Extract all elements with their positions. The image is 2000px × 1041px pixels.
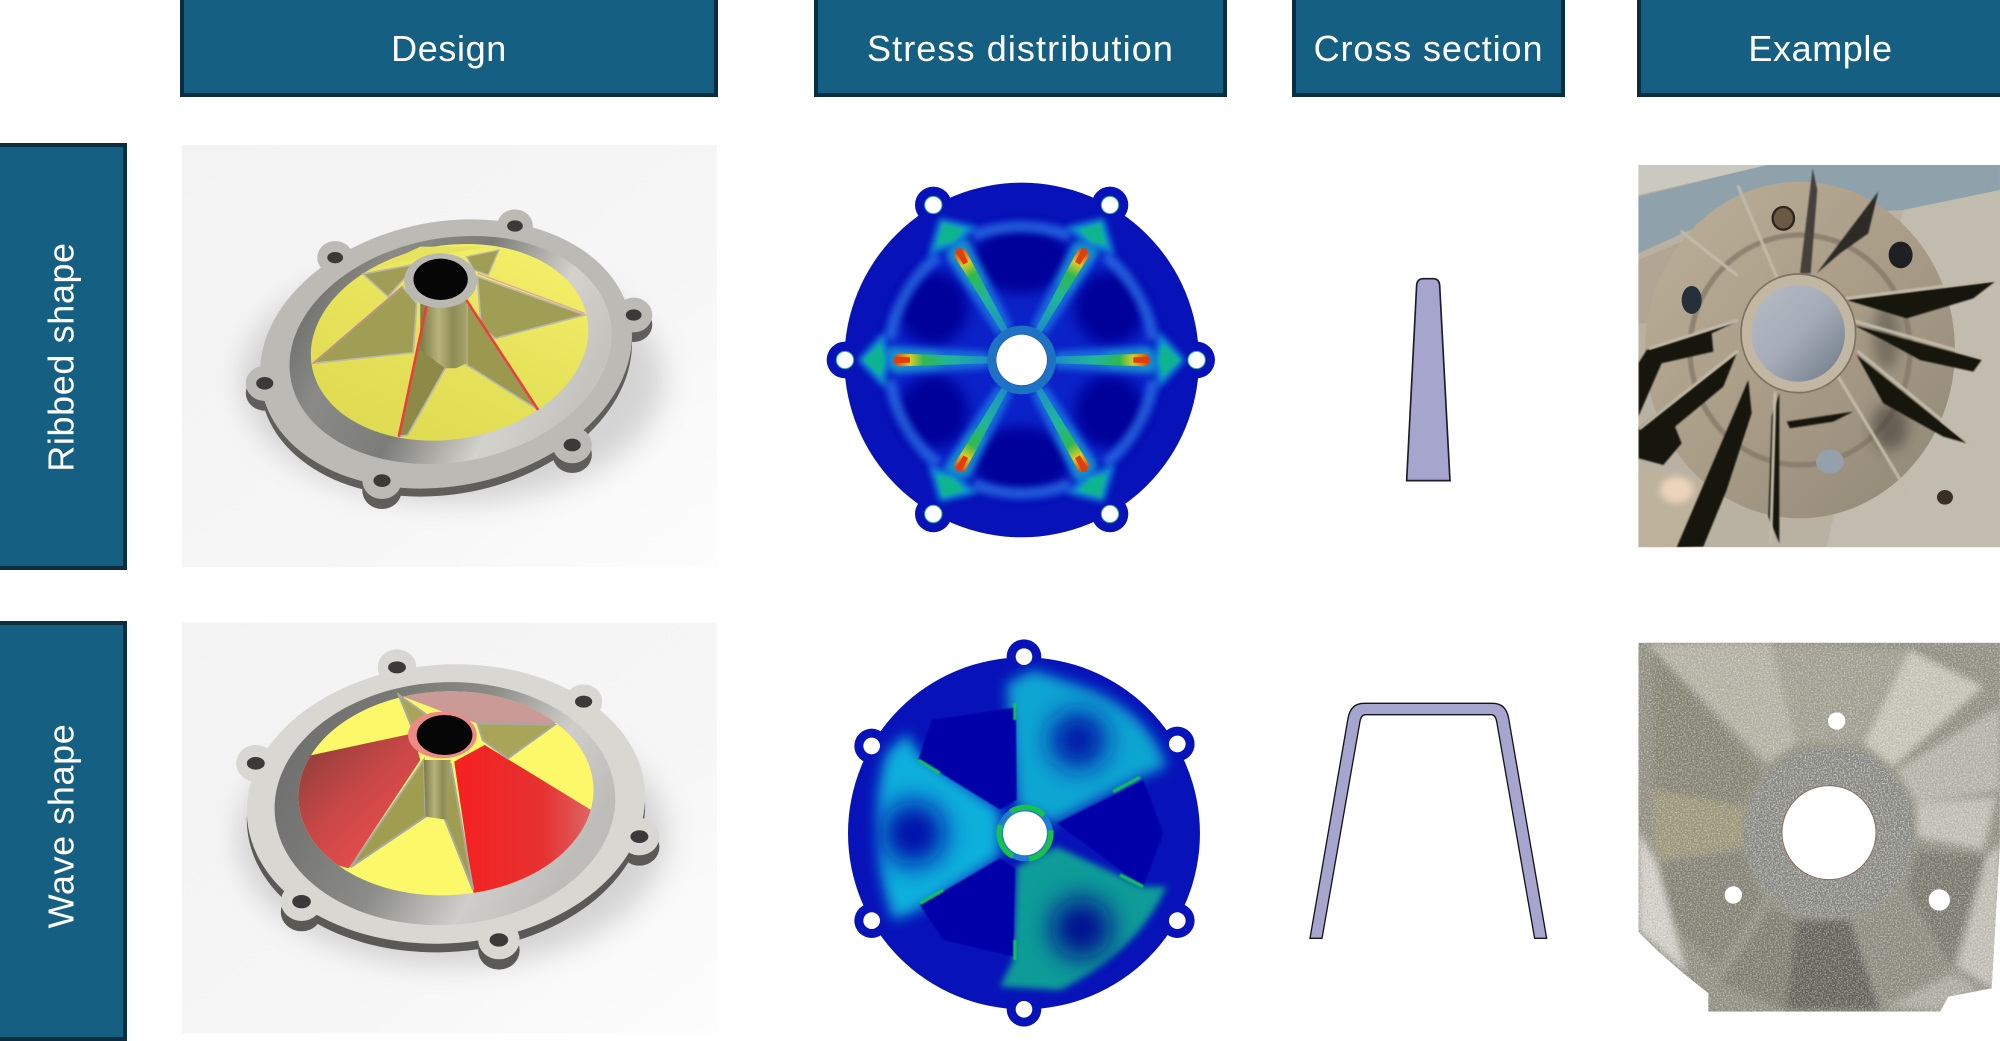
bolt holes (836, 196, 1205, 523)
red edge highlights (313, 273, 585, 437)
ribs (351, 695, 554, 890)
chart: wave shape stress distribution (848, 639, 1200, 1027)
heading: Example: Example (1748, 28, 1893, 69)
heading: Cross section: Cross section (1314, 28, 1543, 69)
render background (182, 623, 717, 1033)
disc (827, 183, 1215, 537)
centre hole (996, 335, 1047, 385)
central bore (1782, 786, 1876, 880)
casting holes (1682, 207, 1953, 505)
row label: Wave shape: Wave shape (40, 724, 82, 928)
illustration layer (182, 145, 2000, 1033)
panel: wave shape design render (182, 623, 717, 1033)
light ribs (1640, 187, 1993, 543)
heading: Cross section (1292, 0, 1565, 97)
heading: Example (1637, 0, 2000, 97)
photo backdrop (1638, 165, 2000, 547)
row label: Ribbed shape: Ribbed shape (40, 242, 82, 471)
recessed ring (265, 207, 636, 493)
central hub (1741, 274, 1856, 393)
bolt holes (1725, 712, 1950, 911)
heading: Design: Design (391, 28, 507, 69)
heading: Design (180, 0, 718, 97)
casting disc (1645, 182, 1955, 518)
highlight (1660, 477, 1693, 503)
sand texture (1638, 643, 2000, 1013)
casting facets (1638, 643, 2000, 1012)
central hub (404, 253, 477, 308)
row label: Ribbed shape (0, 143, 127, 570)
bolt holes (863, 648, 1186, 1018)
cross section: wave (1310, 703, 1547, 938)
dark reflective fins (1638, 168, 1995, 547)
heading: Stress distribution: Stress distribution (867, 28, 1174, 69)
ribs (313, 247, 585, 437)
casting base (1638, 643, 2000, 1013)
ribbed part flange (229, 184, 663, 532)
heading: Stress distribution (814, 0, 1227, 97)
chart: ribbed shape stress distribution (827, 166, 1215, 554)
stress field spokes (855, 214, 1188, 506)
disc shadows (1872, 303, 1908, 450)
cross section: ribbed (1407, 279, 1450, 481)
yellow cone surface (291, 221, 608, 464)
render background (182, 145, 717, 567)
wave part flange (234, 649, 659, 970)
hub ring (997, 805, 1053, 861)
photo: ribbed casting example (1638, 165, 2000, 547)
stress field wave sectors (876, 670, 1167, 990)
panel: ribbed shape design render (182, 145, 717, 567)
central hub (408, 712, 477, 758)
disc (848, 639, 1200, 1027)
central boss (1744, 748, 1915, 919)
hub ring (992, 330, 1052, 390)
recessed ring (266, 672, 624, 936)
photo: wave casting example (1638, 643, 2000, 1013)
red wave sectors (298, 691, 591, 893)
row label: Wave shape (0, 621, 127, 1041)
yellow cone surface (293, 684, 599, 902)
